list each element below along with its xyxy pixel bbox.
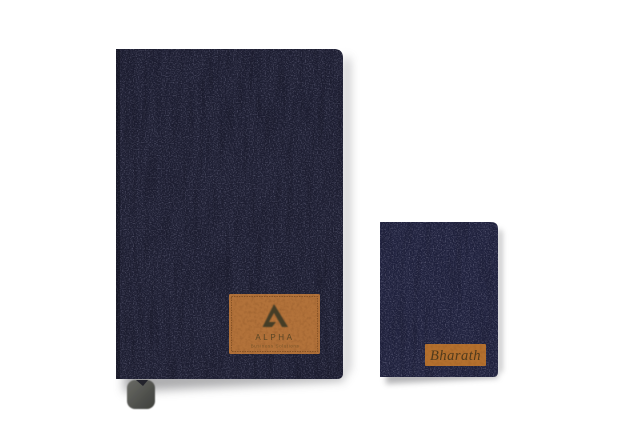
leather patch: Alpha (229, 294, 320, 354)
logo: triangle A (262, 304, 288, 327)
notebook denim cover (116, 49, 343, 379)
engraved name: Bharath (430, 348, 481, 364)
notebook (116, 49, 349, 409)
notebook shadow (124, 56, 349, 392)
leather patch: Bharath (425, 344, 486, 366)
card holder denim cover (380, 222, 498, 377)
card holder shadow (386, 228, 502, 384)
brand name: ALPHA (255, 333, 295, 342)
brand tagline: Business Solutions (251, 344, 300, 348)
card holder (380, 222, 502, 384)
bookmark pendant (127, 380, 155, 409)
